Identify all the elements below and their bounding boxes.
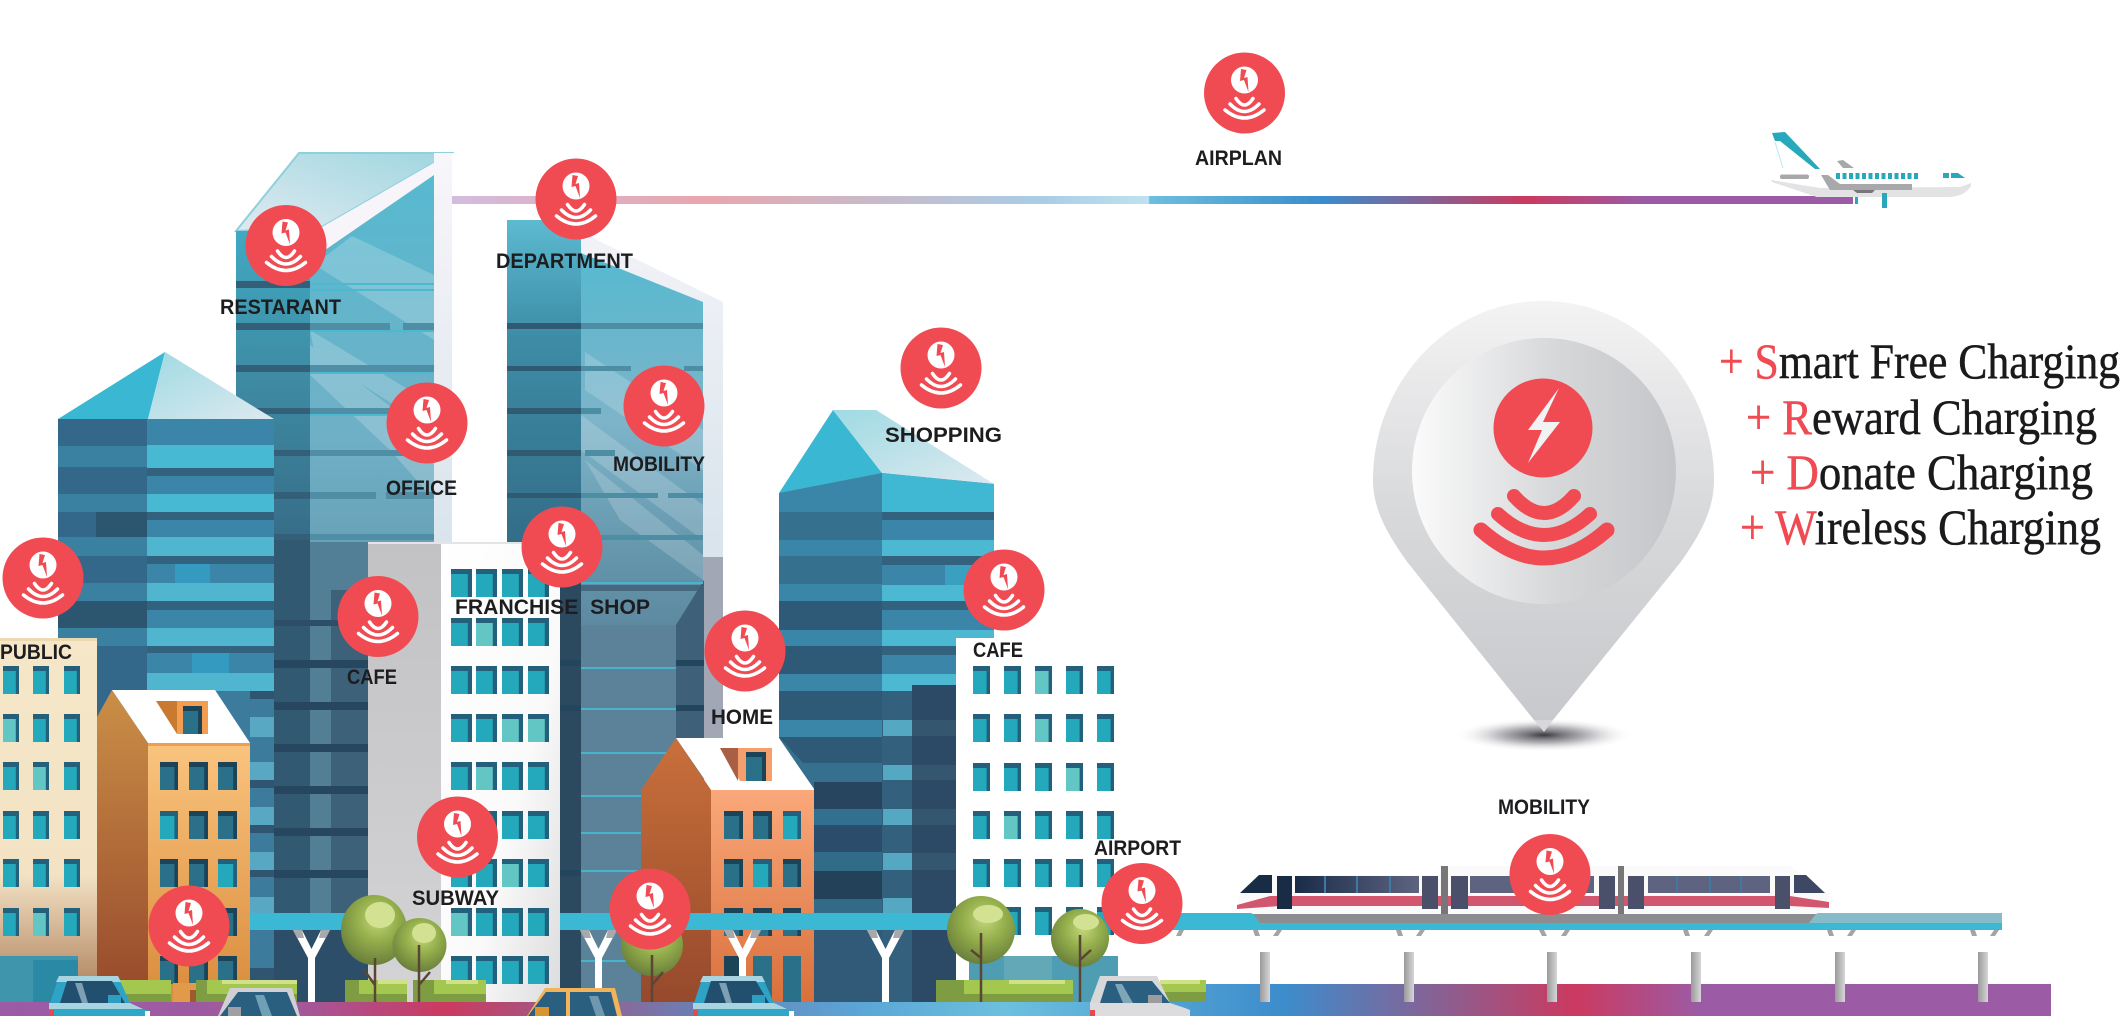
building: glass tower (department) bbox=[507, 220, 723, 1002]
elevated rail track bbox=[250, 913, 2002, 930]
car: silver right bbox=[1090, 976, 1190, 1016]
label: public: PUBLIC bbox=[0, 641, 72, 664]
label: mobility tower: MOBILITY bbox=[613, 453, 705, 476]
train nose right bbox=[1794, 875, 1825, 893]
train nose left bbox=[1240, 875, 1272, 893]
train red stripe bbox=[1237, 896, 1829, 909]
windows bbox=[1836, 173, 1965, 179]
label: subway: SUBWAY bbox=[412, 887, 499, 910]
building: left blue tower bbox=[58, 352, 274, 1002]
tree 3 bbox=[621, 914, 683, 1002]
car: blue middle bbox=[693, 976, 794, 1016]
feature: donate charging: + Donate Charging bbox=[1750, 444, 2093, 500]
ground gradient band bbox=[0, 984, 2051, 1016]
red charge circle bbox=[1494, 378, 1592, 478]
marker: public bbox=[2, 538, 84, 618]
tree 4 bbox=[947, 896, 1015, 1002]
large map pin bbox=[1373, 301, 1714, 752]
lightning bolt bbox=[1528, 388, 1560, 463]
airplane bbox=[1770, 132, 1971, 208]
window dividers bbox=[1324, 876, 1742, 893]
car: blue left bbox=[49, 976, 150, 1016]
pin shadow bbox=[1454, 718, 1634, 752]
feature list bbox=[1719, 333, 2120, 555]
inner disc bbox=[1412, 338, 1676, 604]
marker: train bbox=[1510, 834, 1590, 915]
building: tall glass tower (restaurant) bbox=[236, 153, 452, 1002]
marker: street house bbox=[148, 886, 230, 966]
marker: cafe right bbox=[964, 550, 1044, 630]
building: cafe bbox=[956, 638, 1120, 1002]
pin body bbox=[1373, 301, 1714, 720]
wing bbox=[1821, 175, 1912, 190]
rail pillars bbox=[1176, 930, 1999, 1002]
label: mobility train: MOBILITY bbox=[1498, 796, 1590, 819]
fuselage bbox=[1770, 169, 1971, 197]
marker: department bbox=[536, 158, 616, 240]
marker: airport bbox=[1102, 863, 1182, 944]
marker: mobility tower bbox=[624, 366, 704, 446]
building: shopping tower bbox=[779, 410, 994, 1002]
flight path line bbox=[452, 196, 1853, 204]
train windows left bbox=[1295, 876, 1419, 893]
label: airplan: AIRPLAN bbox=[1195, 147, 1282, 170]
building: orange house right (home) bbox=[641, 738, 814, 1002]
train bbox=[1237, 866, 1829, 923]
train underframe bbox=[1253, 914, 1816, 923]
marker: airplane bbox=[1204, 52, 1285, 134]
tree 5 bbox=[1051, 909, 1109, 1002]
marker: cafe left bbox=[338, 576, 418, 657]
landing gear bbox=[1855, 193, 1887, 208]
train doors bbox=[1277, 876, 1790, 909]
label: restarant: RESTARANT bbox=[220, 296, 341, 319]
track supports bbox=[293, 930, 904, 1002]
hedges bbox=[119, 980, 1206, 1002]
marker: franchise shop bbox=[522, 506, 602, 588]
label: shopping: SHOPPING bbox=[885, 424, 1002, 447]
label: department: DEPARTMENT bbox=[496, 250, 633, 273]
marker: shopping bbox=[900, 328, 982, 408]
marker: street tree bbox=[610, 868, 690, 950]
train poles bbox=[1441, 866, 1624, 914]
tree 2 bbox=[392, 918, 446, 1002]
tree 1 bbox=[341, 895, 407, 1002]
label: airport: AIRPORT bbox=[1094, 837, 1181, 860]
label: home: HOME bbox=[711, 706, 773, 729]
label: cafe left: CAFE bbox=[347, 666, 397, 689]
train windows right bbox=[1648, 876, 1770, 893]
building: public bbox=[0, 638, 97, 1002]
label: cafe right: CAFE bbox=[973, 639, 1023, 662]
marker: home bbox=[704, 610, 786, 692]
train windows middle bbox=[1470, 876, 1594, 893]
marker: office bbox=[386, 382, 468, 464]
marker: restaurant bbox=[246, 205, 326, 286]
tail fin bbox=[1772, 132, 1820, 169]
car: yellow bbox=[527, 988, 622, 1016]
wireless waves bbox=[1481, 496, 1607, 558]
label: franchise shop: FRANCHISE SHOP bbox=[455, 596, 650, 619]
building: orange house left bbox=[97, 690, 250, 1002]
label: office: OFFICE bbox=[386, 477, 457, 500]
car: silver middle-left bbox=[218, 988, 300, 1016]
marker: subway bbox=[417, 796, 498, 878]
building: office with franchise shop bbox=[368, 542, 560, 1002]
